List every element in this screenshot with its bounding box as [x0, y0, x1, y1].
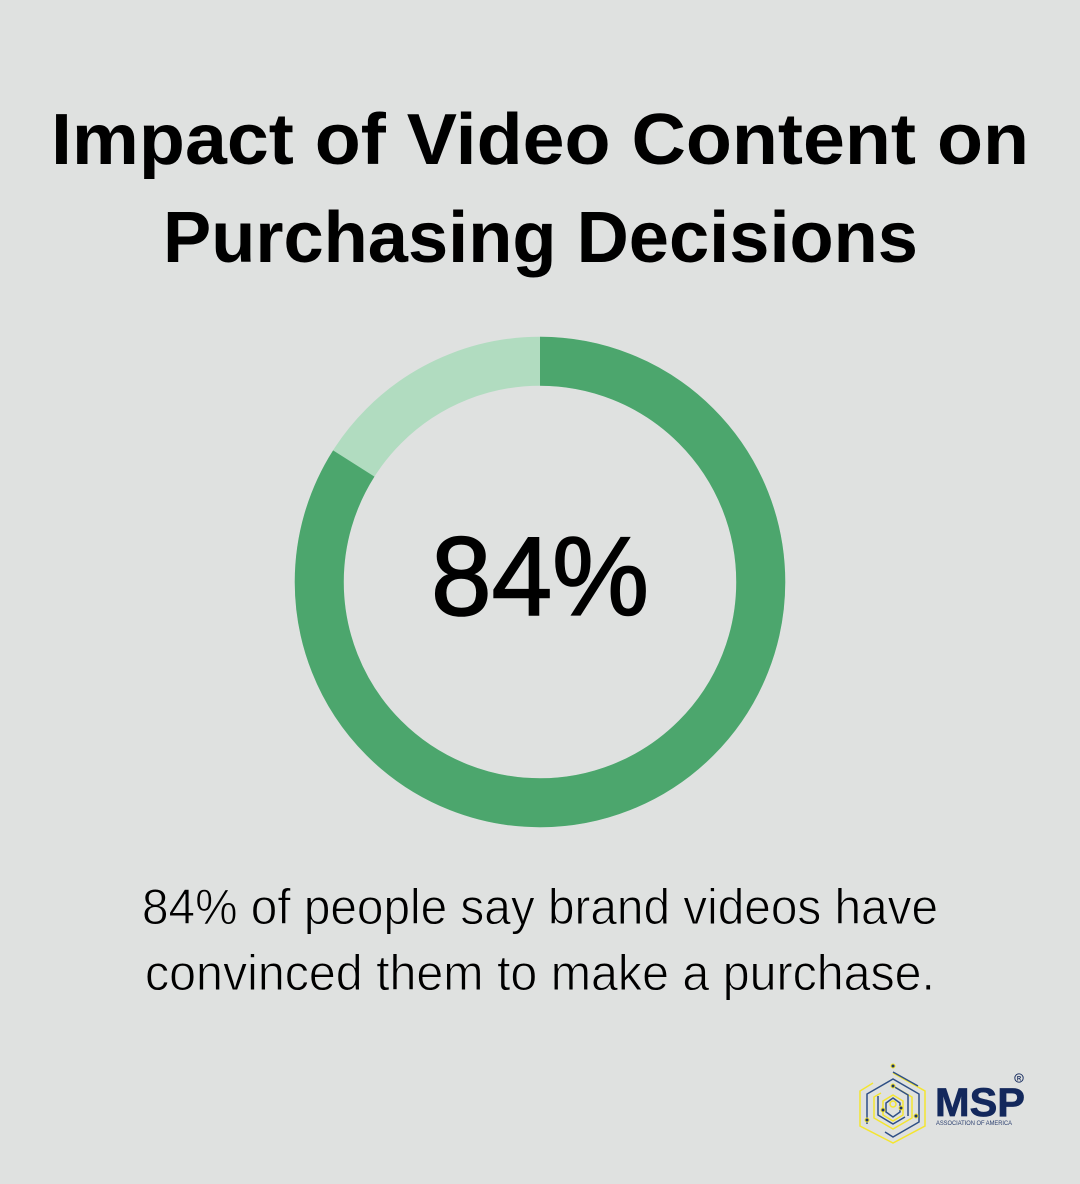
description text: [142, 879, 938, 1001]
description text: convinced them to make a purchase.: [145, 945, 935, 1001]
donut chart: 84%: [319, 361, 761, 803]
icon: circuit nodes: [865, 1064, 918, 1122]
title: Purchasing Decisions: [163, 198, 918, 278]
logo wordmark: MSP: [935, 1081, 1025, 1125]
logo: MSP Association of America: [860, 1064, 1025, 1143]
donut value: 84%: [431, 514, 649, 639]
icon: hexagon circuit: [860, 1072, 925, 1143]
title: Impact of Video Content on: [51, 100, 1029, 180]
description text: 84% of people say brand videos have: [142, 879, 938, 935]
logo tagline: ASSOCIATION OF AMERICA: [936, 1120, 1013, 1127]
title: [51, 100, 1029, 278]
registered mark: [1015, 1074, 1023, 1082]
registered mark: R: [1017, 1076, 1022, 1082]
